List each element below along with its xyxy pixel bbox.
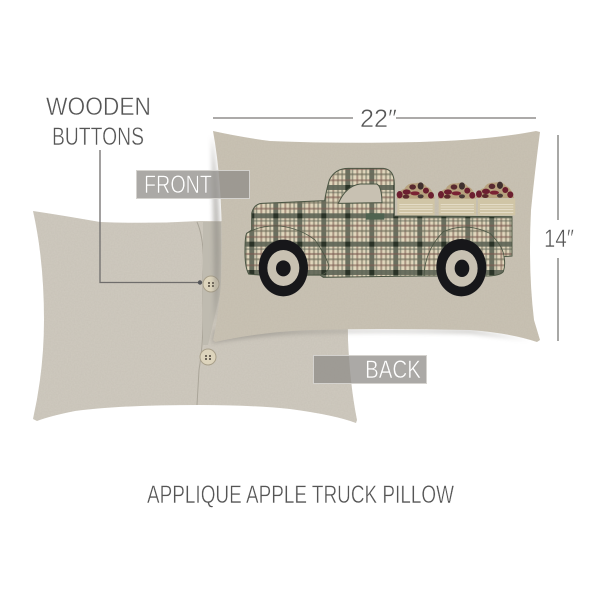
truck door handle <box>366 213 384 220</box>
title: APPLIQUE APPLE TRUCK PILLOW <box>147 481 454 509</box>
callout: wooden buttons: BUTTONS <box>52 123 144 151</box>
back pillow flap seam <box>197 222 203 405</box>
truck window <box>338 184 382 203</box>
truck applique <box>245 168 515 296</box>
callout: wooden buttons <box>46 93 202 285</box>
label: back: BACK <box>365 356 421 384</box>
label: front: FRONT <box>144 171 212 199</box>
dimension: height 14 inches: 14″ <box>544 225 574 253</box>
truck baskets and apples <box>397 182 515 215</box>
dimension: width 22 inches: 22″ <box>360 105 397 133</box>
truck front fender <box>247 226 329 275</box>
button: lower <box>200 349 216 365</box>
button placket <box>203 222 221 345</box>
leader line <box>100 150 200 282</box>
back pillow <box>33 211 357 423</box>
callout: wooden buttons: WOODEN <box>46 93 151 121</box>
button: upper <box>203 276 219 292</box>
truck front wheel <box>259 240 308 296</box>
truck rear fender <box>424 227 504 276</box>
label: back <box>314 356 426 384</box>
front pillow shadow <box>212 135 530 343</box>
truck body <box>245 168 512 277</box>
front pillow <box>213 131 540 342</box>
truck rear wheel <box>436 239 486 296</box>
